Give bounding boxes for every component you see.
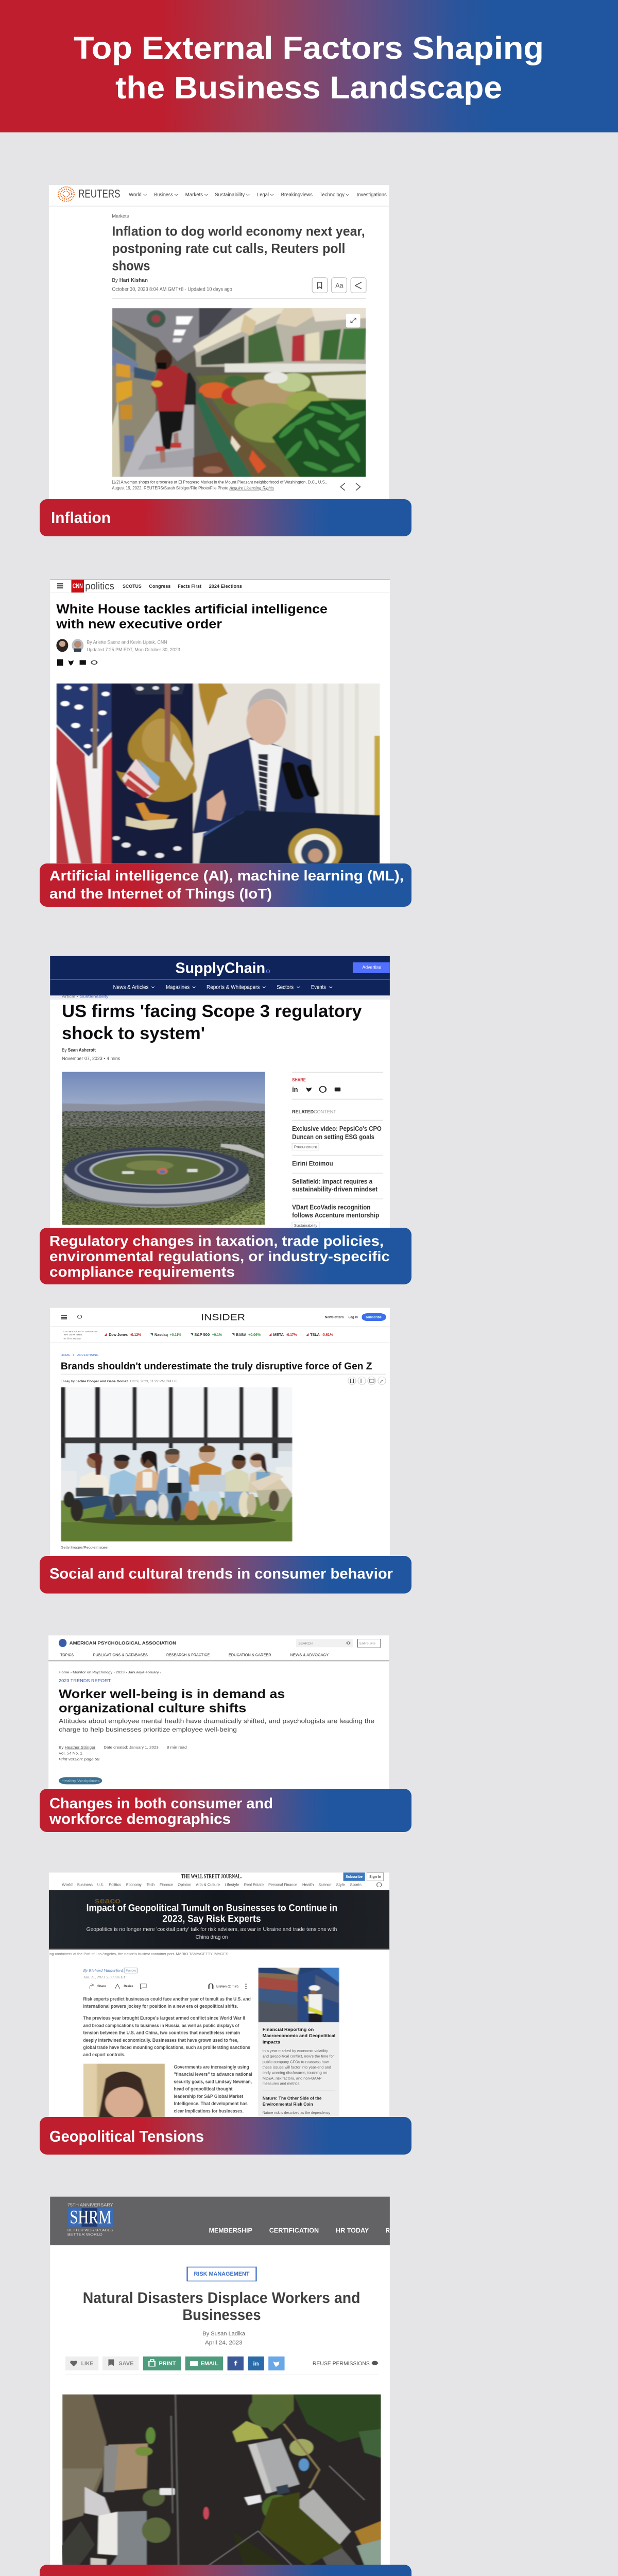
- headline: with new executive order: [56, 617, 222, 631]
- sidebar: promoted content: Financial Reporting on: [263, 2027, 314, 2032]
- article screenshot: Reuters: World: [129, 192, 142, 198]
- sidebar: promoted content: Nature: The Other Side of the: [263, 2096, 321, 2100]
- headline: [83, 2289, 360, 2323]
- byline with avatars: By Arlette Saenz and Kevin Liptak, CNN: [87, 639, 167, 645]
- article screenshot: Wall Street Journal: Health: [302, 1883, 314, 1887]
- sidebar: share and related content: in: [292, 1086, 298, 1093]
- share buttons: LIKE: [81, 2361, 93, 2367]
- label pill: social and cultural trends: [40, 1556, 411, 1594]
- panel: artificial intelligence: [40, 580, 411, 907]
- article screenshot: SupplyChain: By Sean Ashcroft: [62, 1047, 96, 1053]
- sidebar: promoted content: early warning disclosures, touching on: [263, 2071, 327, 2075]
- share buttons: SAVE: [118, 2361, 133, 2367]
- article screenshot: American Psychological Association: PUBLICATIONS & DATABASES: [93, 1653, 148, 1657]
- headline: US firms 'facing Scope 3 regulatory: [62, 1002, 362, 1021]
- byline and article tools: Resize: [124, 1985, 133, 1988]
- article screenshot: Reuters: October 30, 2023 8:04 AM GMT+8 · Updated 10 days ago: [112, 287, 232, 293]
- headline: White House tackles artificial intelligence: [56, 602, 328, 616]
- headline: shock to system': [62, 1024, 205, 1043]
- article screenshot: SHRM: CERTIFICATION: [269, 2227, 319, 2234]
- article screenshot: CNN Politics: [50, 580, 390, 873]
- photo: flooded neighbourhood aerial: [61, 2394, 381, 2566]
- article body text: Governments are increasingly using: [174, 2064, 249, 2070]
- article screenshot: CNN Politics: politics: [85, 580, 114, 591]
- article screenshot: Wall Street Journal: Lifestyle: [225, 1883, 239, 1887]
- label pill: Inflation: Inflation: [51, 509, 111, 527]
- byline: Vol. 54 No. 1: [59, 1751, 82, 1755]
- article body text: tension between the U.S. and China, two countries that nonetheless remain: [83, 2030, 240, 2035]
- article screenshot: American Psychological Association: Worker well-being is in demand as: [59, 1687, 285, 1701]
- photo caption: [112, 480, 327, 490]
- sidebar: promoted content: [258, 1968, 339, 2118]
- stock ticker: BABA: [236, 1333, 246, 1337]
- article screenshot: Wall Street Journal: Personal Finance: [268, 1883, 297, 1887]
- subheading: charge to help businesses prioritize employee well-being: [59, 1726, 237, 1733]
- article screenshot: Reuters: Markets: [185, 192, 203, 198]
- search box: SEARCH: [298, 1642, 313, 1646]
- article screenshot: SupplyChain: Article • Sustainability: [62, 994, 109, 999]
- article screenshot: Insider: Log in: [349, 1315, 358, 1319]
- label pill: AI, ML, IoT: and the Internet of Things (IoT): [49, 886, 272, 902]
- panel: social and cultural trends: [40, 1308, 411, 1594]
- logo: SHRM: SHRM: [70, 2207, 112, 2228]
- byline and article tools: Share: [97, 1985, 106, 1988]
- article screenshot: CNN Politics: CNN: [73, 582, 83, 589]
- hero banner with headline: China drag on: [196, 1935, 228, 1940]
- label pill: social and cultural trends: Social and cultural trends in consumer behavior: [49, 1566, 393, 1582]
- article body text: deeply intertwined economically. Businesses that have grown used to free,: [83, 2037, 238, 2043]
- article screenshot: Insider: [50, 1308, 390, 1556]
- hero banner with headline: Geopolitics is no longer mere 'cocktail party' talk for risk advisers, as war in Ukraine and trade tensions with: [87, 1927, 337, 1933]
- label pill: regulatory changes: compliance requirements: [49, 1264, 235, 1280]
- share buttons: REUSE PERMISSIONS: [313, 2361, 370, 2367]
- logo: SupplyChain: SupplyChain: [176, 960, 265, 976]
- stock ticker: +0.1%: [212, 1333, 222, 1337]
- photo: President speaking at podium: [56, 683, 380, 873]
- sidebar: share and related content: Duncan on setting ESG goals: [292, 1133, 374, 1141]
- share buttons: f: [234, 2360, 237, 2367]
- logo: SHRM: 75TH ANNIVERSARY: [67, 2203, 113, 2208]
- article screenshot: Wall Street Journal: Science: [318, 1883, 332, 1887]
- article body text: The previous year brought Europe's largest armed conflict since World War II: [83, 2015, 245, 2021]
- article screenshot: Reuters: Technology: [320, 192, 345, 198]
- sidebar: share and related content: Eirini Etoimou: [292, 1160, 333, 1167]
- label pill: geopolitical tensions: [40, 2117, 411, 2155]
- article screenshot: Wall Street Journal: Opinion: [178, 1883, 191, 1887]
- article screenshot: SupplyChain: Magazines: [166, 984, 190, 991]
- photo: seven young people on grass: [61, 1387, 293, 1541]
- subheading: [59, 1718, 374, 1733]
- share buttons: [65, 2357, 378, 2375]
- sidebar: share and related content: RELATEDCONTENT: [292, 1109, 336, 1114]
- stock ticker: +0.06%: [248, 1333, 261, 1337]
- sidebar: promoted content: public company CFOs to reassess how: [263, 2060, 329, 2064]
- article screenshot: Wall Street Journal: Economy: [126, 1883, 142, 1887]
- article screenshot: SupplyChain: Events: [311, 984, 326, 991]
- article screenshot: Reuters: REUTERS: [78, 188, 120, 200]
- byline and article tools: Listen (2 min): [216, 1985, 238, 1988]
- photo: portrait of expert: [83, 2063, 165, 2120]
- article body text: [83, 1996, 252, 2113]
- article screenshot: Wall Street Journal: Business: [77, 1883, 93, 1887]
- article screenshot: CNN Politics: Congress: [149, 584, 170, 589]
- tag: Healthy Workplaces: [61, 1779, 100, 1783]
- sidebar: share and related content: Sustainability: [294, 1223, 318, 1228]
- sidebar: share and related content: Sellafield: Impact requires a: [292, 1178, 372, 1185]
- label pill: demographics: [40, 1789, 411, 1832]
- stock ticker: META: [273, 1333, 284, 1337]
- article screenshot: SupplyChain: [50, 955, 390, 1230]
- article screenshot: American Psychological Association: Home › Monitor on Psychology › 2023 › January/February ›: [59, 1671, 161, 1674]
- headline: organizational culture shifts: [59, 1701, 246, 1715]
- article screenshot: Wall Street Journal: Real Estate: [244, 1883, 264, 1887]
- label pill: demographics: Changes in both consumer and: [49, 1795, 273, 1812]
- byline: By Heather Stringer: [59, 1745, 95, 1750]
- article screenshot: American Psychological Association: TOPICS: [60, 1653, 74, 1657]
- byline with avatars: [56, 639, 180, 652]
- panel: geopolitical tensions: [40, 1873, 411, 2155]
- label pill: geopolitical tensions: Geopolitical Tensions: [49, 2127, 204, 2145]
- article screenshot: CNN Politics: SCOTUS: [123, 584, 142, 589]
- article screenshot: SHRM: April 24, 2023: [205, 2340, 243, 2346]
- article screenshot: Insider: Oct 9, 2023, 11:22 PM GMT+8: [130, 1380, 178, 1383]
- hero banner with headline: [49, 1890, 389, 1950]
- article screenshot: Wall Street Journal: ing containers at the Port of Los Angeles, the nation's busiest container port. MARIO TAMA/GETTY IMAGES: [49, 1953, 228, 1956]
- stock ticker: S&P 500: [194, 1333, 210, 1337]
- byline: Print version: page 58: [59, 1757, 99, 1761]
- article screenshot: SHRM: R: [386, 2227, 390, 2234]
- article screenshot: SHRM: HR TODAY: [336, 2227, 369, 2234]
- article screenshot: SHRM: By Susan Ladika: [202, 2331, 245, 2337]
- article screenshot: Reuters: [49, 185, 389, 507]
- sidebar: share and related content: follows Accenture mentorship: [292, 1212, 379, 1219]
- article screenshot: Reuters: Breakingviews: [281, 192, 313, 198]
- article screenshot: Reuters: Investigations: [357, 192, 387, 198]
- article screenshot: Wall Street Journal: Arts & Culture: [196, 1883, 220, 1887]
- tag: [59, 1777, 102, 1784]
- label pill: Inflation: [40, 499, 411, 536]
- article screenshot: American Psychological Association: RESEARCH & PRACTICE: [166, 1653, 210, 1657]
- stock ticker: [63, 1330, 333, 1340]
- hero banner with headline: 2023, Say Risk Experts: [162, 1913, 261, 1924]
- article screenshot: Insider: HOME: [61, 1353, 70, 1357]
- logo: SHRM: [67, 2203, 113, 2237]
- sidebar: share and related content: [292, 1072, 383, 1228]
- article screenshot: SupplyChain: Reports & Whitepapers: [207, 984, 260, 991]
- article screenshot: SHRM: [50, 2197, 390, 2570]
- article screenshot: Wall Street Journal: Sign In: [369, 1875, 381, 1879]
- byline and article tools: [83, 1968, 246, 1989]
- label pill: regulatory changes: environmental regulations, or industry-specific: [49, 1248, 390, 1264]
- headline: [59, 1687, 285, 1715]
- sidebar: promoted content: Macroeconomic and Geopolitical: [263, 2033, 335, 2038]
- label pill: regulatory changes: Regulatory changes in taxation, trade policies,: [49, 1233, 384, 1249]
- article screenshot: Wall Street Journal: [49, 1873, 389, 2120]
- search box: Entire Site: [359, 1642, 376, 1645]
- article body text: head of geopolitical thought: [174, 2086, 233, 2092]
- sidebar: promoted content: measures and metrics.: [263, 2082, 300, 2086]
- stock ticker: -0.61%: [321, 1333, 333, 1337]
- article screenshot: Wall Street Journal: Politics: [109, 1883, 121, 1887]
- byline and article tools: Follow: [126, 1969, 136, 1972]
- headline: [56, 602, 328, 631]
- label pill: AI, ML, IoT: [40, 863, 411, 907]
- article body text: and broad complications to business in Russia, as well as public displays of: [83, 2023, 239, 2028]
- sidebar: promoted content: and geopolitical conflict, now's the time for: [263, 2055, 334, 2059]
- logo: SHRM: BETTER WORKPLACES: [67, 2228, 113, 2232]
- label pill: AI, ML, IoT: Artificial intelligence (AI), machine learning (ML),: [49, 868, 404, 884]
- logo: CNN politics: [72, 580, 84, 592]
- article screenshot: Wall Street Journal: U.S.: [97, 1883, 104, 1887]
- icon: Reuters logo: [58, 187, 74, 201]
- article screenshot: Wall Street Journal: Risk experts predict businesses could face another year of tumult as the U.S. and: [83, 1996, 251, 2002]
- label pill: regulatory changes: [40, 1228, 411, 1284]
- hero banner with headline: seaco: [95, 1896, 121, 1906]
- photo: ring-shaped campus aerial: [62, 1072, 265, 1225]
- headline: [112, 224, 365, 273]
- title: Top External Factors Shaping: [74, 30, 544, 65]
- panel: regulatory changes: [40, 955, 411, 1284]
- byline: [59, 1745, 187, 1761]
- label pill: natural disasters: [40, 2565, 411, 2576]
- panel: inflation: [40, 185, 411, 536]
- article body text: and export controls.: [83, 2052, 125, 2057]
- icons: social share: [57, 659, 97, 666]
- article screenshot: Wall Street Journal: Style: [336, 1883, 345, 1887]
- headline: [62, 1002, 362, 1043]
- photo: woman shopping at produce aisle: [112, 308, 369, 477]
- tag: RISK MANAGEMENT: [194, 2271, 250, 2277]
- article screenshot: Reuters: Markets: [112, 214, 129, 219]
- sidebar: share and related content: Exclusive video: PepsiCo's CPO: [292, 1125, 382, 1132]
- article screenshot: Reuters: By Hari Kishan: [112, 278, 148, 283]
- sidebar: promoted content: Environmental Risk Coin: [263, 2102, 313, 2107]
- panel: natural disasters: [40, 2197, 411, 2576]
- article screenshot: Reuters: Legal: [257, 192, 269, 198]
- headline: Businesses: [182, 2306, 261, 2323]
- share buttons: EMAIL: [201, 2361, 218, 2367]
- article screenshot: SupplyChain: Advertise: [362, 965, 381, 970]
- logo: SHRM: BETTER WORLD: [67, 2232, 102, 2237]
- article screenshot: Wall Street Journal: Tech: [147, 1883, 154, 1887]
- article screenshot: American Psychological Association: EDUCATION & CAREER: [229, 1653, 271, 1657]
- stock ticker: -0.12%: [130, 1333, 141, 1337]
- article buttons: [312, 278, 366, 293]
- article screenshot: Insider: ADVERTISING: [77, 1353, 98, 1357]
- stock ticker: TSLA: [310, 1333, 320, 1337]
- headline: Natural Disasters Displace Workers and: [83, 2289, 360, 2306]
- title: the Business Landscape: [115, 70, 502, 105]
- article screenshot: SHRM: MEMBERSHIP: [209, 2227, 252, 2234]
- article screenshot: Insider: Essay by Jackie Cooper and Gabe Gomez: [61, 1380, 128, 1383]
- stock ticker: +0.11%: [170, 1333, 181, 1337]
- byline with avatars: Updated 7:25 PM EDT, Mon October 30, 2023: [87, 647, 180, 652]
- byline: 8 min read: [167, 1745, 187, 1750]
- article body text: Intelligence. That development has: [174, 2101, 248, 2106]
- byline: Date created: January 1, 2023: [104, 1745, 159, 1750]
- photo caption: August 19, 2022. REUTERS/Sarah Silbiger/File Photo/File Photo Acquire Licensing Rights: [112, 485, 274, 490]
- article screenshot: Wall Street Journal: Sports: [350, 1883, 362, 1887]
- article screenshot: Insider: Getty Images/PeopleImages: [61, 1546, 108, 1549]
- label pill: demographics: workforce demographics: [49, 1811, 231, 1827]
- photo caption: [1/2] A woman shops for groceries at El Progreso Market in the Mount Pleasant neighborhood of Washington, D.C., U.S.,: [112, 480, 327, 485]
- headline: Inflation to dog world economy next year,: [112, 224, 365, 239]
- logo: APA: [59, 1639, 66, 1647]
- panel: demographics: [40, 1635, 411, 1832]
- article screenshot: Insider: Newsletters: [325, 1315, 344, 1319]
- sidebar: promoted content: these issues will factor into year-end and: [263, 2065, 331, 2070]
- search box: [296, 1639, 381, 1648]
- stock ticker: US MARKETS OPEN IN:: [63, 1330, 98, 1333]
- sidebar: share and related content: Procurement: [294, 1145, 317, 1149]
- icons: share buttons: [348, 1377, 386, 1385]
- logo: Insider: INSIDER: [201, 1312, 245, 1322]
- article screenshot: CNN Politics: 2024 Elections: [209, 584, 242, 589]
- stock ticker: Nasdaq: [154, 1333, 168, 1337]
- byline and article tools: Jan. 11, 2023 5:30 am ET: [83, 1975, 126, 1979]
- article body text: clear implications for businesses.: [174, 2108, 244, 2113]
- article screenshot: American Psychological Association: 2023 TRENDS REPORT: [59, 1679, 111, 1683]
- article screenshot: Wall Street Journal: THE WALL STREET JOURNAL.: [181, 1873, 242, 1879]
- article screenshot: Wall Street Journal: global trade have faced mounting complications, such as proliferating sanctions: [83, 2045, 250, 2050]
- sidebar: promoted content: MD&A, risk factors, and non-GAAP: [263, 2076, 321, 2080]
- article screenshot: Wall Street Journal: Subscribe: [346, 1875, 363, 1879]
- article screenshot: Wall Street Journal: "financial levers" to advance national: [174, 2072, 252, 2077]
- title: [74, 30, 544, 105]
- sidebar: share and related content: sustainability-driven mindset: [292, 1185, 377, 1193]
- icon: expand button: [346, 314, 360, 328]
- sidebar: promoted content: Nature risk is described as the dependency: [263, 2111, 331, 2115]
- stock ticker: 7H 37M 50S: [63, 1333, 82, 1336]
- article screenshot: SupplyChain: Sectors: [277, 984, 294, 991]
- article screenshot: SupplyChain: News & Articles: [113, 984, 149, 991]
- article screenshot: American Psychological Association: [48, 1635, 389, 1790]
- sidebar: promoted content: Impacts: [263, 2040, 280, 2044]
- article screenshot: Reuters: Aa: [335, 282, 344, 289]
- article body text: international powers jockey for position in a new era of geopolitical shifts.: [83, 2004, 238, 2009]
- article screenshot: Wall Street Journal: Finance: [160, 1883, 173, 1887]
- byline and article tools: By Richard Vanderford: [83, 1969, 123, 1973]
- article screenshot: American Psychological Association: AMERICAN PSYCHOLOGICAL ASSOCIATION: [70, 1641, 176, 1646]
- sidebar: promoted content: In a year marked by economic volatility: [263, 2049, 328, 2053]
- article screenshot: Insider: Subscribe: [366, 1315, 382, 1319]
- article body text: leadership for S&P Global Market: [174, 2093, 243, 2099]
- article screenshot: Reuters: Business: [154, 192, 173, 198]
- tag: [187, 2267, 256, 2281]
- sidebar: share and related content: SHARE: [292, 1077, 306, 1082]
- stock ticker: In the news: [63, 1337, 81, 1340]
- article screenshot: American Psychological Association: NEWS & ADVOCACY: [290, 1653, 329, 1657]
- share buttons: in: [253, 2361, 259, 2367]
- article screenshot: CNN Politics: Facts First: [178, 584, 201, 589]
- sidebar: share and related content: VDart EcoVadis recognition: [292, 1204, 370, 1211]
- share buttons: PRINT: [159, 2361, 176, 2367]
- article screenshot: Wall Street Journal: World: [62, 1883, 73, 1887]
- article screenshot: SupplyChain: November 07, 2023 • 4 mins: [62, 1056, 120, 1061]
- article screenshot: Wall Street Journal: security goals, said Lindsay Newman,: [174, 2079, 252, 2084]
- title banner: [0, 0, 618, 132]
- stock ticker: -0.17%: [286, 1333, 297, 1337]
- stock ticker: Dow Jones: [109, 1333, 128, 1337]
- article screenshot: Reuters: Sustainability: [215, 192, 245, 198]
- headline: shows: [112, 258, 150, 273]
- headline: postponing rate cut calls, Reuters poll: [112, 241, 345, 256]
